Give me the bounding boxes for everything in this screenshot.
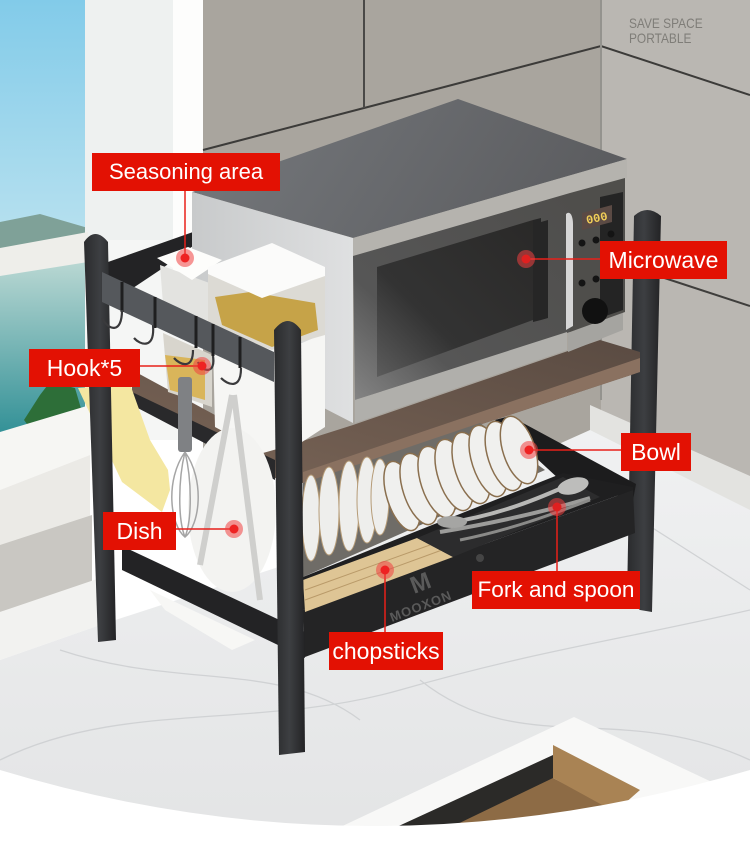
rack back post [627, 210, 661, 612]
leader lines [140, 191, 621, 632]
rear upper rail [108, 232, 193, 290]
label: hook*5: Hook*5 [47, 355, 122, 381]
window view [0, 0, 90, 440]
large pasta jar and white box [208, 243, 325, 453]
window frame and pale wall [0, 0, 203, 612]
tongs [200, 395, 260, 600]
caption: save space portable: SAVE SPACE [629, 15, 703, 31]
label: microwave [600, 241, 727, 279]
tray rear rim [495, 416, 636, 500]
label: microwave: Microwave [609, 247, 718, 273]
label: seasoning area [92, 153, 280, 191]
whisk [172, 377, 198, 537]
chopsticks [303, 538, 453, 612]
label: fork and spoon: Fork and spoon [478, 577, 634, 602]
rack of plates [302, 412, 545, 577]
caption: save space portable [629, 15, 703, 46]
marker dots [176, 249, 566, 579]
label: seasoning area: Seasoning area [109, 159, 263, 184]
utensil tray [303, 473, 635, 657]
lower shelf frame [122, 546, 305, 658]
label: fork and spoon [472, 571, 640, 609]
microwave [192, 99, 627, 423]
oven glove [78, 384, 170, 512]
caption: save space portable: PORTABLE [629, 30, 691, 46]
cutlery compartment [417, 477, 600, 557]
label: bowl: Bowl [631, 439, 681, 465]
label: dish [103, 512, 176, 550]
floor object at bottom [300, 717, 750, 846]
grey tiled wall [203, 0, 750, 520]
white vignette curve [0, 770, 750, 846]
fork and spoon [437, 474, 591, 540]
label: dish: Dish [116, 518, 162, 544]
marble countertop [0, 430, 750, 846]
small jar with pasta below rail [163, 333, 212, 407]
brand watermark: MOOXON [388, 587, 454, 625]
large white dish [150, 428, 276, 650]
hook rail [102, 272, 274, 384]
rack front posts [84, 234, 305, 755]
label: hook*5 [29, 349, 140, 387]
hooks [102, 310, 241, 384]
microwave: 000 [585, 210, 609, 228]
upper shelf wood [132, 340, 640, 483]
brand watermark [388, 567, 454, 625]
label: chopsticks: chopsticks [332, 638, 440, 664]
label: chopsticks [329, 632, 443, 670]
brand watermark: M [406, 567, 435, 600]
label: bowl [621, 433, 691, 471]
small jar [157, 247, 222, 340]
